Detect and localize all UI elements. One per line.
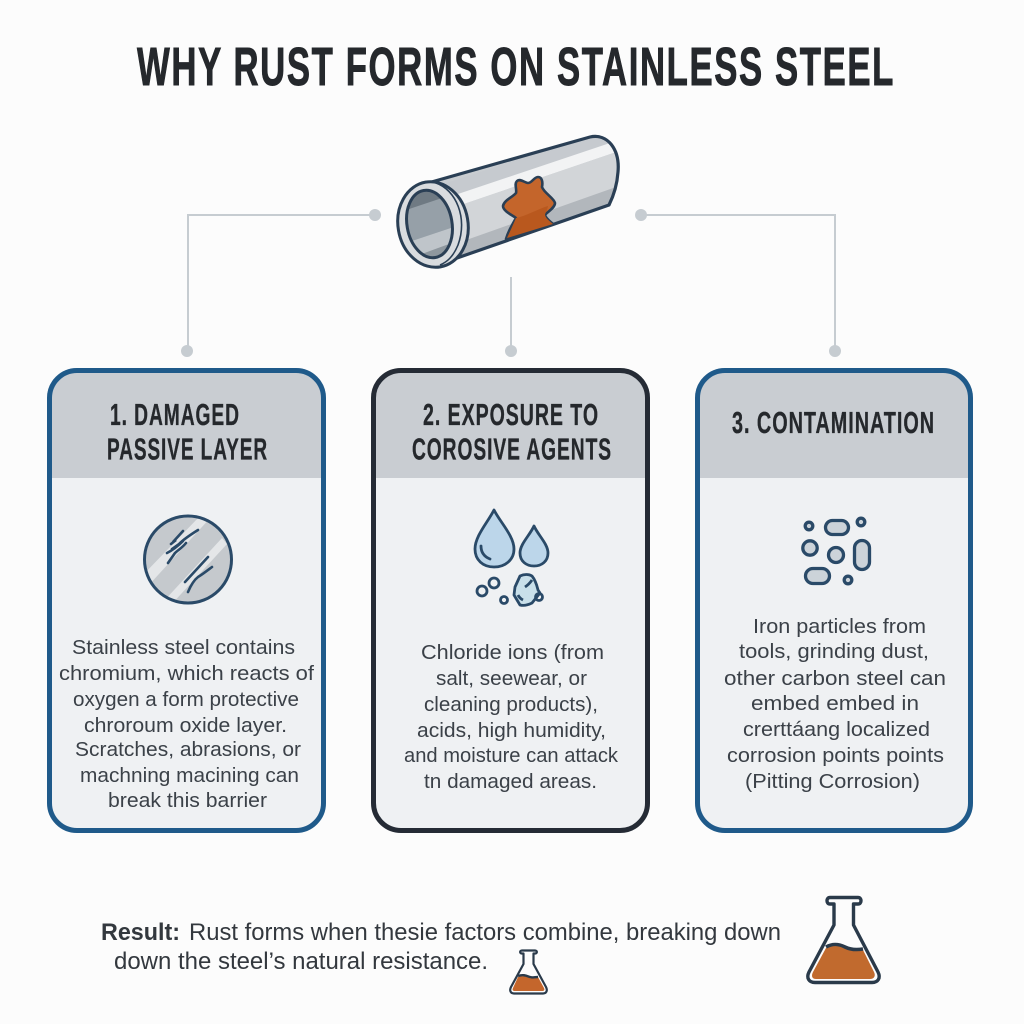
result statement: Rust forms when thesie factors combine, breaking down [189, 919, 781, 946]
body text: oxygen a form protective [73, 688, 299, 711]
body text: salt, seewear, or [436, 667, 587, 690]
body text: crerttáang localized [743, 718, 930, 741]
result statement: down the steel’s natural resistance. [114, 948, 488, 975]
pipe opening [396, 180, 470, 269]
body text: cleaning products), [424, 693, 598, 716]
icon: rusted steel pipe [396, 134, 620, 269]
heading [412, 397, 612, 466]
connector: right [635, 209, 841, 357]
icon: large flask [808, 898, 879, 982]
body text: machning macining can [80, 764, 299, 787]
result statement [101, 919, 781, 975]
panel: damaged passive layer [47, 368, 326, 833]
icon: small flask [510, 950, 547, 994]
body text [59, 636, 314, 812]
body text [404, 641, 619, 793]
rust patch [503, 177, 555, 239]
heading: COROSIVE AGENTS [412, 432, 612, 466]
body text: and moisture can attack [404, 744, 619, 767]
body text: chroroum oxide layer. [84, 714, 287, 737]
body text: break this barrier [108, 789, 267, 812]
body text: Iron particles from [753, 615, 926, 638]
body text: Stainless steel contains [72, 636, 295, 659]
body text [724, 615, 946, 793]
body text: Scratches, abrasions, or [75, 738, 301, 761]
icon: scratched surface [142, 516, 232, 606]
body text: tn damaged areas. [424, 770, 597, 793]
body text: Chloride ions (from [421, 641, 604, 664]
icon: water drops and salt [475, 510, 548, 605]
body text: tools, grinding dust, [739, 640, 929, 663]
heading [107, 397, 268, 466]
body text: acids, high humidity, [417, 719, 606, 742]
icon: metal particles [803, 518, 870, 584]
result statement: Result: [101, 919, 180, 946]
connector: left [181, 209, 381, 357]
body text: corrosion points points [727, 744, 944, 767]
heading: PASSIVE LAYER [107, 432, 268, 466]
connector: centre [505, 277, 517, 357]
body text: embed embed in [751, 692, 919, 715]
body text: chromium, which reacts of [59, 662, 314, 685]
body text: other carbon steel can [724, 667, 946, 690]
panel: contamination [695, 368, 973, 833]
heading: 1. DAMAGED [110, 397, 240, 432]
heading: 2. EXPOSURE TO [423, 397, 599, 432]
body text: (Pitting Corrosion) [745, 770, 920, 793]
panel: exposure to corrosive agents [371, 368, 650, 833]
